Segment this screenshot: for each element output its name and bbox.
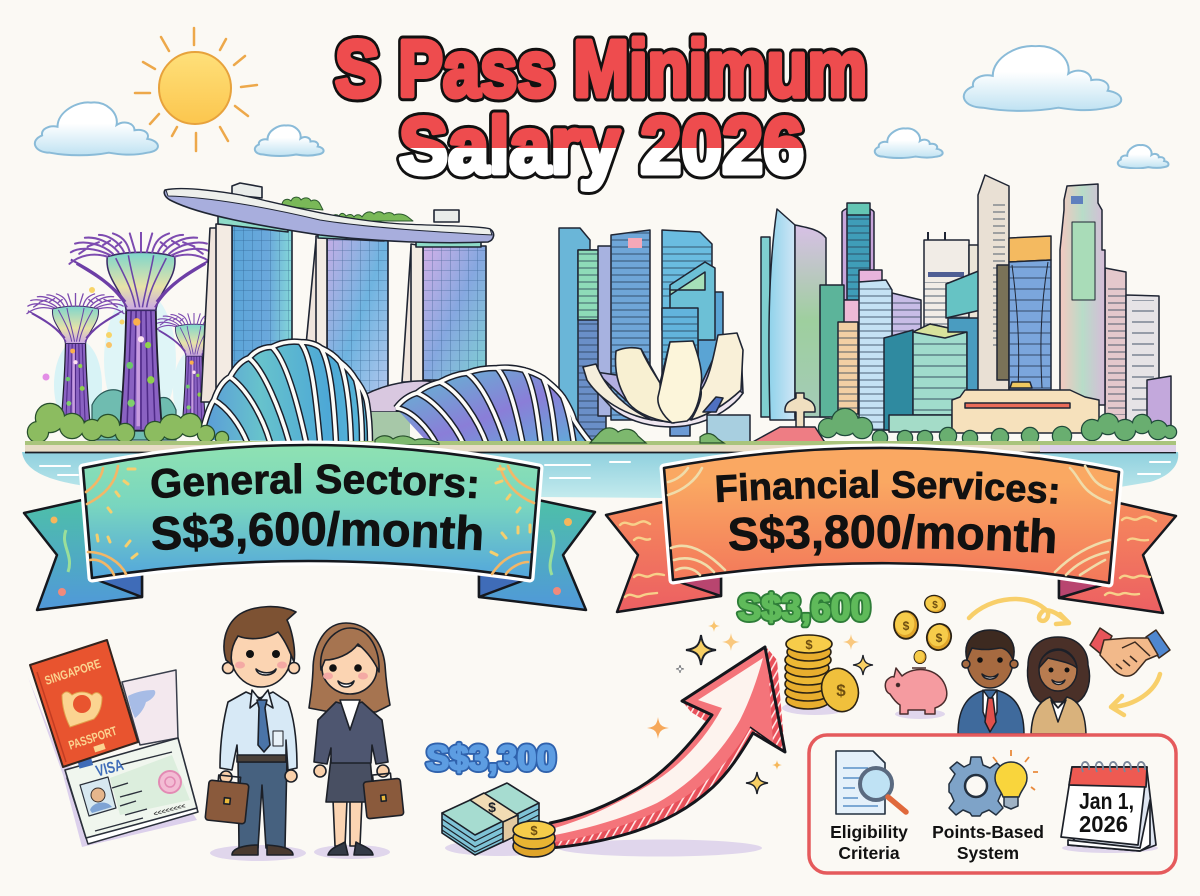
ribbon folds	[92, 572, 530, 597]
label: S$3,300: S$3,300	[426, 739, 556, 778]
banner: General Sectors: General Sectors:	[151, 463, 477, 498]
icon: rising arrow	[550, 647, 785, 856]
skyline: Fullerton and waterfront	[707, 382, 1099, 446]
visa page	[65, 738, 198, 844]
icon: flying coins	[894, 592, 955, 664]
cloud left large	[35, 102, 158, 155]
icon: gear and light bulb	[949, 750, 1038, 816]
icon: flying coins: $	[932, 600, 938, 611]
figure: colleague woman	[1028, 637, 1090, 734]
shirt	[220, 692, 297, 770]
icon: small coin stack: $	[530, 823, 538, 838]
skirt	[326, 758, 374, 802]
banner: Financial Services	[604, 444, 1178, 614]
left ribbon tail	[606, 502, 721, 612]
banner: General Sectors: S$3,600/month	[152, 510, 482, 554]
hands	[314, 765, 326, 777]
skyline: greenery and ground	[25, 404, 1176, 452]
hair	[309, 623, 390, 712]
icon: coin tower	[782, 635, 864, 716]
passport cover: PASSPORT	[67, 724, 119, 753]
icon: handshake	[1090, 628, 1170, 676]
icon: small coin stack	[513, 821, 555, 857]
ribbon folds	[673, 573, 1109, 598]
skyline: Gardens by the Bay domes	[201, 342, 592, 445]
icon: passport and visa	[28, 640, 198, 847]
figure: businesswoman	[309, 623, 404, 859]
banner ornaments	[668, 466, 1112, 575]
skyline: ArtScience Museum	[583, 333, 743, 436]
title: Salary 2026	[399, 101, 804, 190]
hands	[220, 771, 232, 783]
icon: coin tower: $	[805, 637, 813, 652]
label: eligibility criteria: Criteria	[838, 843, 900, 863]
icon: calendar: Jan 1,	[1079, 788, 1134, 814]
icon: flying coins: $	[936, 631, 943, 645]
banner ornaments	[86, 466, 534, 575]
visa page: <<<<<<<<	[153, 803, 186, 818]
label: points-based system: Points-Based	[932, 822, 1044, 842]
arrow shaft and head	[550, 647, 785, 848]
icon: calendar: 2026	[1079, 811, 1128, 837]
briefcase	[363, 772, 404, 819]
icon: document with magnifier	[836, 751, 906, 814]
jacket	[314, 702, 388, 764]
cloud far right	[1118, 145, 1168, 168]
icon: sun	[135, 28, 257, 151]
cloud right large	[964, 46, 1121, 111]
label: eligibility criteria: Eligibility	[830, 822, 908, 842]
cloud left small	[255, 125, 324, 156]
skyline: central towers	[559, 228, 723, 446]
head	[322, 645, 377, 694]
briefcase	[205, 774, 250, 824]
right ribbon tail	[479, 500, 595, 610]
right ribbon tail	[1059, 503, 1176, 613]
icon: cash stack: $	[488, 799, 496, 815]
legs	[333, 800, 362, 846]
cloud center right	[875, 128, 943, 158]
label: S$3,600: S$3,600	[738, 587, 870, 628]
title	[335, 24, 867, 190]
skyline: Marina Bay Sands	[164, 183, 494, 414]
arrows: yellow cycle	[969, 599, 1160, 715]
banner: Financial Services: Financial Services:	[716, 470, 1058, 504]
sparkles	[647, 620, 873, 794]
main ribbon	[83, 445, 539, 578]
tie	[257, 700, 270, 752]
trousers	[238, 758, 287, 848]
banner: General Sectors	[22, 440, 596, 612]
visa page: VISA	[94, 757, 126, 780]
banner text	[700, 497, 1075, 505]
main ribbon	[664, 448, 1119, 583]
water	[22, 452, 1178, 500]
passport cover	[30, 640, 138, 767]
icon: cash stack	[442, 783, 555, 856]
skyline: Supertrees	[27, 232, 233, 440]
shoes	[232, 845, 293, 855]
banner text	[140, 493, 490, 499]
panel: key facts	[809, 735, 1176, 873]
label: points-based system: System	[957, 843, 1019, 863]
title: S Pass Minimum	[335, 24, 867, 113]
white swoosh	[555, 658, 763, 835]
icon: piggy bank	[885, 668, 947, 719]
figure: businessman	[205, 607, 306, 861]
icon: calendar	[1061, 762, 1158, 853]
icon: flying coins: $	[903, 619, 910, 633]
passport cover: SINGAPORE	[43, 657, 103, 688]
visa back page	[122, 670, 178, 745]
head	[231, 623, 291, 687]
figure: colleague man	[958, 630, 1024, 734]
banner: Financial Services: S$3,800/month	[728, 514, 1055, 556]
icon: coin tower: $	[836, 681, 846, 700]
hatched edge	[555, 727, 753, 847]
left ribbon tail	[24, 500, 142, 610]
skyline: CBD high-rises	[761, 175, 1171, 430]
